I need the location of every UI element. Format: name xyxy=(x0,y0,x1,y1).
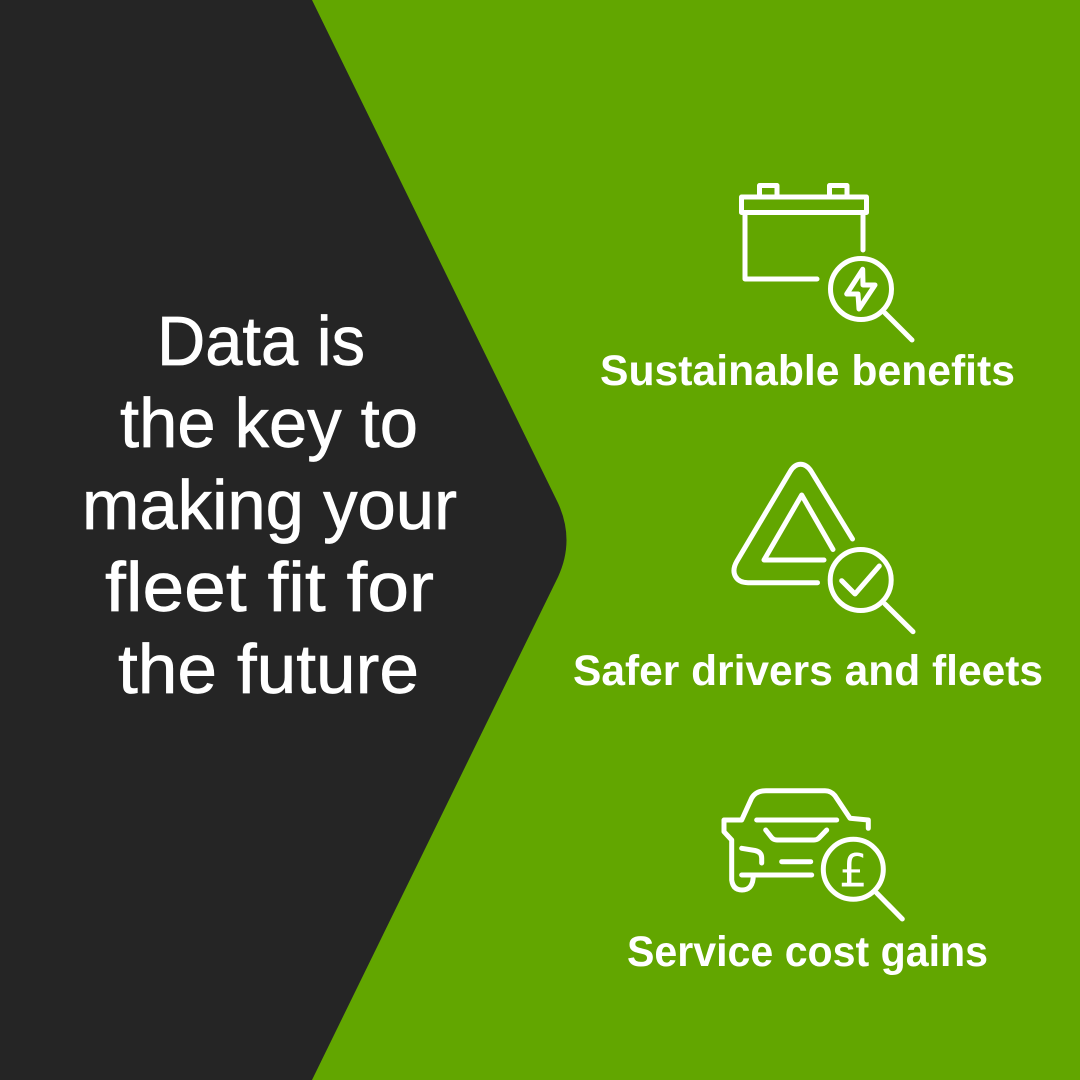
heading: data is the key: the key to xyxy=(120,384,418,462)
heading: data is the key: making your xyxy=(82,466,457,544)
heading: data is the key: Data is xyxy=(157,302,365,380)
icon: car with pound magnifier xyxy=(724,791,902,919)
icon: battery with magnifier xyxy=(742,186,912,340)
heading: data is the key xyxy=(82,302,457,708)
icon: car with pound magnifier: £ xyxy=(839,844,868,898)
heading: data is the key: fleet fit for xyxy=(105,548,434,626)
label: safer drivers and fleets: Safer drivers and fleets xyxy=(573,647,1043,695)
icon: warning triangle with magnifier xyxy=(734,464,913,632)
dark arrow panel xyxy=(0,0,566,1080)
heading: data is the key: the future xyxy=(118,630,419,708)
label: service cost gains: Service cost gains xyxy=(627,928,988,976)
label: sustainable benefits: Sustainable benefits xyxy=(600,347,1015,395)
